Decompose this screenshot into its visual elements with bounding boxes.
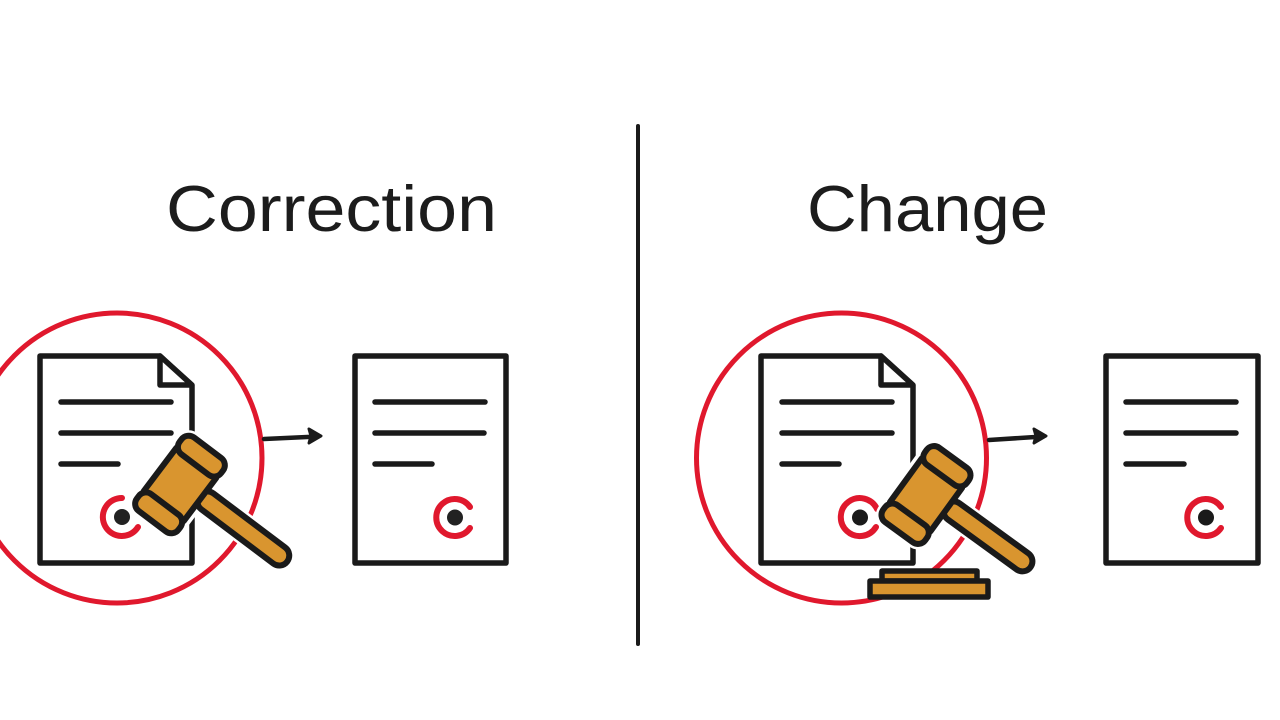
red circle bbox=[0, 313, 262, 603]
red stamp bbox=[103, 498, 138, 536]
heading: Correction: Correction bbox=[166, 172, 497, 245]
arrow: change bbox=[989, 429, 1046, 443]
red circle bbox=[696, 313, 986, 603]
divider line bbox=[636, 126, 640, 644]
gavel base bbox=[870, 571, 988, 597]
red stamp bbox=[1187, 499, 1221, 536]
red stamp bbox=[841, 498, 877, 536]
heading: Change: Change bbox=[807, 172, 1048, 245]
changed document bbox=[1106, 356, 1258, 563]
arrow: correction bbox=[264, 429, 321, 443]
red stamp bbox=[436, 499, 470, 536]
original document bbox=[40, 356, 192, 563]
panel: correction illustration bbox=[0, 313, 313, 603]
panel: change illustration bbox=[696, 313, 1056, 607]
gavel bbox=[132, 432, 313, 601]
gavel bbox=[878, 443, 1056, 607]
corrected document bbox=[355, 356, 506, 563]
original document bbox=[761, 356, 913, 563]
